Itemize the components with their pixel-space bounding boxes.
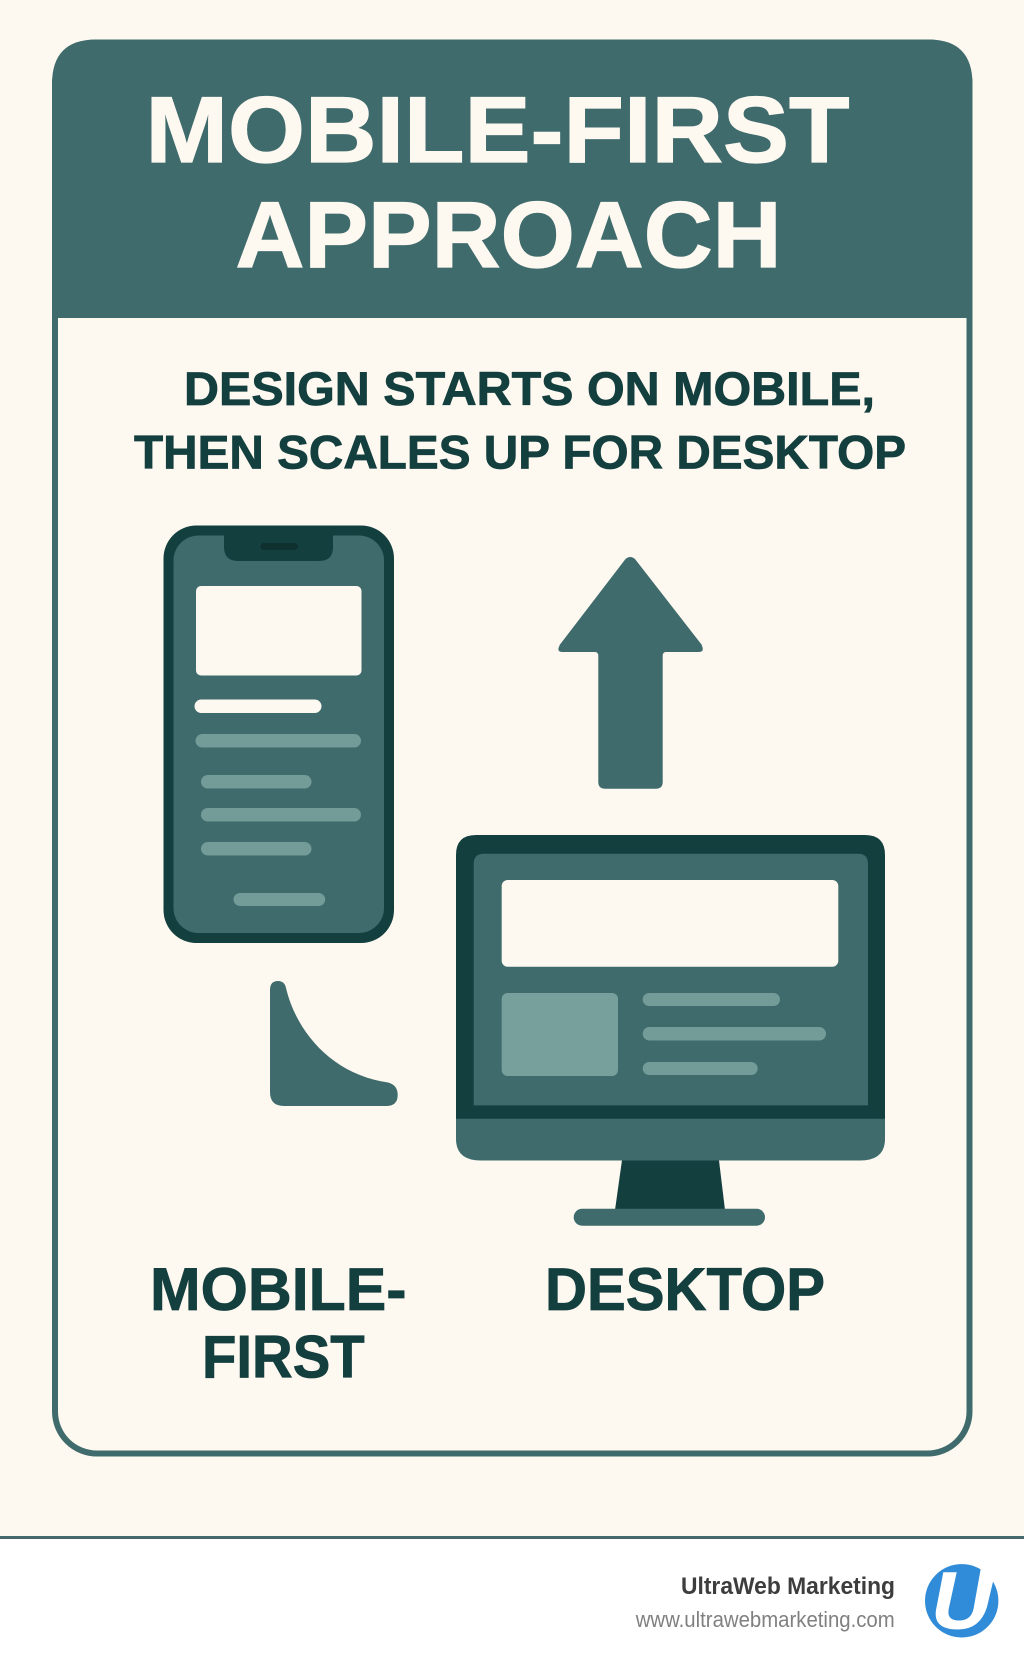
footer brand name: UltraWeb Marketing (681, 1573, 895, 1600)
subtitle (134, 363, 906, 480)
subtitle: THEN SCALES UP FOR DESKTOP (134, 426, 906, 480)
label: mobile-first (150, 1256, 406, 1391)
arrow: curved corner connector (270, 981, 398, 1106)
monitor base (574, 1209, 765, 1226)
icon: smartphone (164, 526, 394, 943)
footer (0, 1536, 1024, 1638)
title: APPROACH (236, 182, 782, 287)
subtitle: DESIGN STARTS ON MOBILE, (184, 363, 875, 416)
icon: UltraWeb logo (925, 1560, 1000, 1638)
monitor stand (615, 1158, 725, 1210)
label: mobile-first: MOBILE- (150, 1256, 406, 1323)
footer url: www.ultrawebmarketing.com (635, 1607, 895, 1632)
title: MOBILE-FIRST (146, 77, 849, 182)
title (146, 77, 849, 287)
label: desktop: DESKTOP (545, 1256, 825, 1323)
arrow: scale up (558, 557, 703, 789)
icon: desktop monitor (456, 835, 885, 1226)
panel: mobile-first card (52, 40, 972, 1454)
header band (52, 40, 972, 318)
label: mobile-first: FIRST (202, 1324, 365, 1391)
